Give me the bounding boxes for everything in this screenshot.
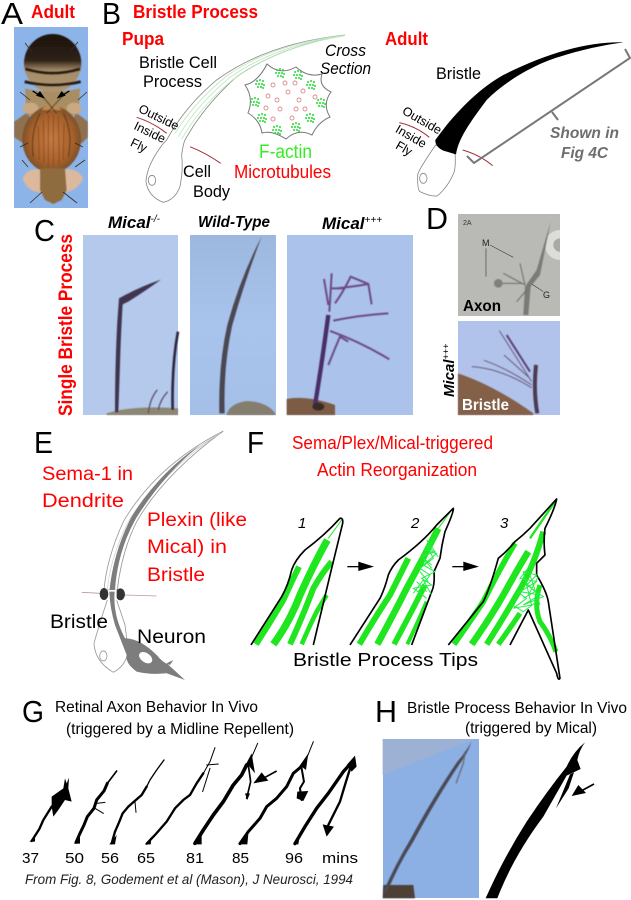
text: Bristle: Bristle — [50, 612, 108, 633]
text: Outside Inside Fly: Outside — [136, 102, 181, 133]
photo: fly — [14, 27, 88, 208]
text: Outside Inside Fly — [393, 104, 444, 159]
legend: Microtubules: Microtubules — [234, 162, 331, 182]
tip numbers: 2 — [410, 515, 420, 532]
time labels: 81 — [186, 850, 204, 867]
label: Mical +++: +++ — [365, 215, 382, 226]
text: Shown in Fig 4C: Fig 4C — [561, 145, 608, 162]
diagram: bristle with neuron — [82, 431, 223, 680]
label: Mical +++: +++ — [441, 344, 451, 359]
label C: C — [34, 213, 55, 248]
tip 3 — [448, 499, 560, 679]
heading — [55, 699, 294, 738]
tip numbers — [298, 515, 509, 532]
label: Mical -/-: Mical — [108, 213, 151, 232]
citation: From Fig. 8, Godement et al (Mason), J Neurosci, 1994 — [25, 871, 353, 887]
photo: axon — [458, 214, 560, 316]
time labels: 96 — [285, 850, 303, 867]
text: Sema-1 in Dendrite: Dendrite — [42, 491, 124, 512]
text: M: M — [482, 238, 490, 248]
text: Sema-1 in Dendrite — [42, 464, 133, 512]
text: Outside Inside Fly — [128, 102, 181, 156]
text: Bristle: Bristle — [462, 397, 509, 414]
text: Bristle: Bristle — [436, 64, 481, 83]
diagram: pupal bristle cell — [137, 35, 345, 202]
heading: (triggered by a Midline Repellent) — [66, 721, 294, 738]
time labels: 50 — [65, 850, 84, 867]
panel B: bristle process — [102, 0, 630, 202]
bracket — [467, 49, 630, 163]
text: Plexin (like Mical) in Bristle: Bristle — [147, 565, 205, 586]
text: Cross Section: Section — [320, 59, 371, 78]
label E: E — [34, 425, 53, 460]
heading: Adult: Adult — [31, 2, 75, 22]
photo: wild-type — [190, 235, 276, 415]
text: 2A: 2A — [463, 220, 472, 227]
time labels: mins — [322, 850, 358, 867]
label G: G — [22, 694, 44, 729]
panel G: retinal axon behavior — [22, 694, 358, 887]
photo: Mical -/- — [83, 235, 178, 415]
caption: Bristle Process Tips — [293, 650, 478, 670]
time labels — [22, 850, 358, 867]
heading: Pupa: Pupa — [122, 29, 165, 49]
text: Shown in Fig 4C — [550, 125, 619, 162]
tip numbers: 1 — [298, 515, 306, 532]
diagram: adult bristle — [399, 42, 623, 196]
diagram: traced bristle — [486, 742, 594, 898]
tip 2 — [350, 508, 453, 645]
text: Plexin (like Mical) in Bristle: Mical) in — [147, 537, 227, 558]
chart: axon time series — [29, 742, 357, 844]
heading: Bristle Process: Bristle Process — [133, 2, 258, 22]
label: Wild-Type: Wild-Type — [198, 214, 270, 231]
heading: Sema/Plex/Mical-triggered — [292, 433, 493, 453]
legend: F-actin: F-actin — [259, 142, 312, 163]
text: Axon: Axon — [463, 298, 501, 315]
heading: Retinal Axon Behavior In Vivo — [55, 699, 258, 716]
text: Outside Inside Fly: Fly — [128, 135, 150, 156]
text: Bristle Cell Process: Process — [143, 72, 202, 91]
text: Cross Section: Cross — [325, 41, 366, 60]
text: Plexin (like Mical) in Bristle: Plexin (like — [147, 510, 247, 531]
tip numbers: 3 — [500, 515, 509, 532]
heading: Bristle Process Behavior In Vivo — [407, 700, 627, 717]
text: Cell Body — [183, 162, 230, 201]
text: Neuron: Neuron — [137, 627, 206, 648]
text: Outside Inside Fly: Inside — [132, 119, 168, 146]
text: Bristle Cell Process — [139, 53, 217, 91]
panel F: actin reorganization — [247, 425, 560, 679]
photo: bristle — [458, 321, 560, 415]
text: Shown in Fig 4C: Shown in — [550, 125, 619, 142]
heading — [407, 700, 627, 737]
text: G: G — [543, 290, 550, 300]
panel A: adult fly — [1, 0, 88, 208]
time labels: 85 — [232, 850, 249, 867]
text: Cell Body: Body — [193, 182, 230, 201]
diagram: tips — [251, 499, 560, 679]
text: Outside Inside Fly: Fly — [393, 138, 415, 159]
time labels: 56 — [101, 850, 119, 867]
tip 1 — [251, 518, 343, 645]
icon: arrows on fly — [33, 91, 69, 99]
panel D: axon and bristle comparison — [426, 201, 560, 415]
heading: Actin Reorganization — [317, 460, 477, 480]
heading — [292, 433, 493, 480]
text: Outside Inside Fly: Outside — [400, 104, 444, 137]
text: Plexin (like Mical) in Bristle — [147, 510, 247, 586]
vertical heading: Single Bristle Process — [56, 234, 77, 416]
time labels: 65 — [137, 850, 155, 867]
photo: bristle time point — [383, 739, 479, 898]
label: Mical +++: Mical — [322, 214, 365, 233]
label D: D — [426, 201, 448, 236]
text: Cross Section — [320, 41, 371, 78]
diagram: cross section — [245, 64, 331, 139]
label: Mical -/-: -/- — [151, 214, 161, 225]
label F: F — [247, 425, 264, 460]
arrow 2 — [452, 562, 479, 571]
heading: (triggered by Mical) — [465, 720, 597, 737]
time labels: 37 — [22, 850, 39, 867]
text: Sema-1 in Dendrite: Sema-1 in — [42, 464, 133, 485]
panel H: bristle process behavior — [375, 694, 627, 898]
arrow — [572, 784, 594, 796]
photo: Mical +++ — [287, 235, 413, 415]
text: Outside Inside Fly: Inside — [393, 122, 429, 151]
label H: H — [375, 694, 397, 729]
panel E: bristle and neuron — [34, 425, 247, 680]
arrow 1 — [347, 562, 374, 571]
label: Mical +++: Mical — [441, 359, 458, 397]
panel C: single bristle process photos — [34, 213, 413, 416]
text: Cell Body: Cell — [183, 162, 211, 181]
heading: Adult: Adult — [385, 29, 428, 49]
text: Bristle Cell Process: Bristle Cell — [139, 53, 217, 72]
